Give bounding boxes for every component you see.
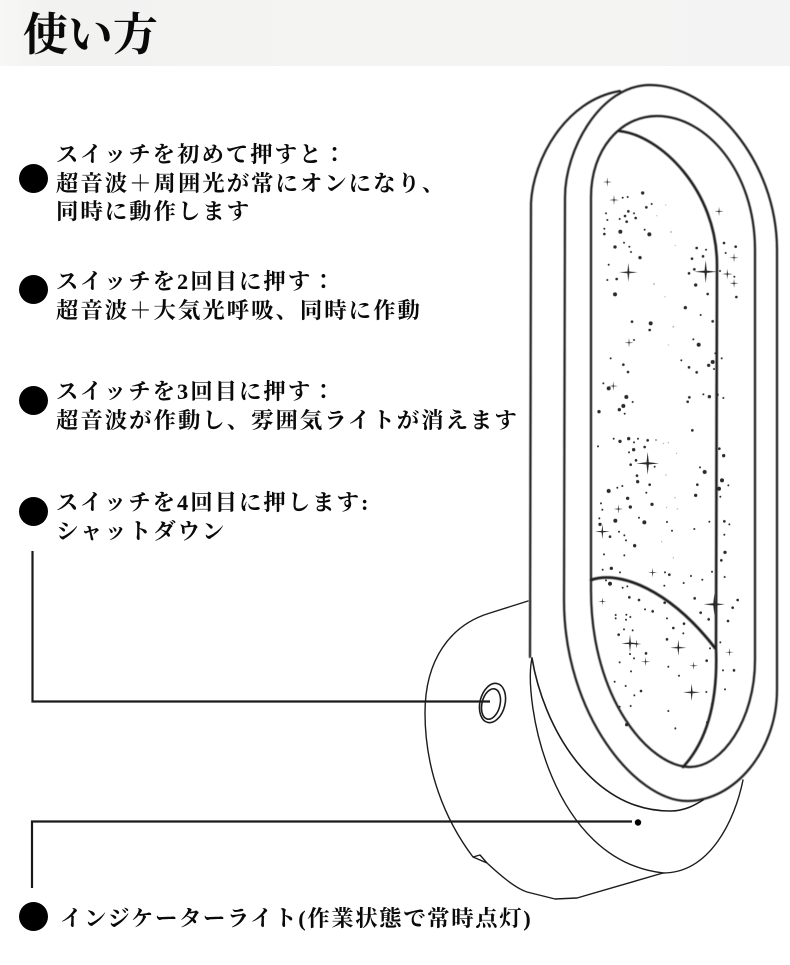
window back edge xyxy=(619,131,717,767)
lamp ring outlines xyxy=(530,85,777,801)
lamp base and rings xyxy=(425,601,743,899)
neck collar curve xyxy=(530,658,743,873)
step 3 text xyxy=(56,379,519,432)
step 1 text: 同時に動作します xyxy=(56,199,251,224)
bullet xyxy=(19,164,48,193)
back ring outer edge xyxy=(530,91,620,657)
indicator light text: インジケーターライト(作業状態で常時点灯) xyxy=(60,906,532,931)
step 4 text block xyxy=(19,490,370,544)
step 1 text xyxy=(56,142,446,224)
step 2 text: 超音波＋大気光呼吸、同時に作動 xyxy=(56,298,422,322)
step 1 text: 超音波＋周囲光が常にオンになり、 xyxy=(56,170,446,196)
wall mount base xyxy=(425,601,663,899)
header band xyxy=(0,0,790,66)
starry pattern lower xyxy=(595,400,739,729)
indicator light dot xyxy=(635,819,641,826)
bullet xyxy=(19,497,48,526)
front ring outer edge xyxy=(564,85,777,801)
indicator light label xyxy=(19,902,532,931)
step 4 text: スイッチを4回目に押します: xyxy=(56,490,370,515)
switch leader line xyxy=(32,551,490,702)
power button xyxy=(476,681,509,725)
step 4 text xyxy=(56,490,370,544)
back ring bottom xyxy=(532,658,703,811)
title: 使い方 xyxy=(23,10,158,60)
step 2 text block xyxy=(19,269,422,322)
front ring inner edge xyxy=(591,116,755,767)
bullet xyxy=(19,386,48,415)
step 1 text block xyxy=(19,142,446,224)
lower window arc xyxy=(591,578,715,648)
step 2 text xyxy=(56,269,422,322)
step 3 text block xyxy=(19,379,519,432)
step 3 text: 超音波が作動し、雰囲気ライトが消えます xyxy=(56,408,519,432)
indicator leader line xyxy=(32,822,632,888)
bullet xyxy=(19,275,48,304)
bullet xyxy=(19,902,48,931)
starry pattern upper xyxy=(602,177,739,399)
step 3 text: スイッチを3回目に押す： xyxy=(56,379,337,404)
step 2 text: スイッチを2回目に押す： xyxy=(56,269,337,294)
step 4 text: シャットダウン xyxy=(56,518,226,544)
step 1 text: スイッチを初めて押すと： xyxy=(56,142,348,167)
